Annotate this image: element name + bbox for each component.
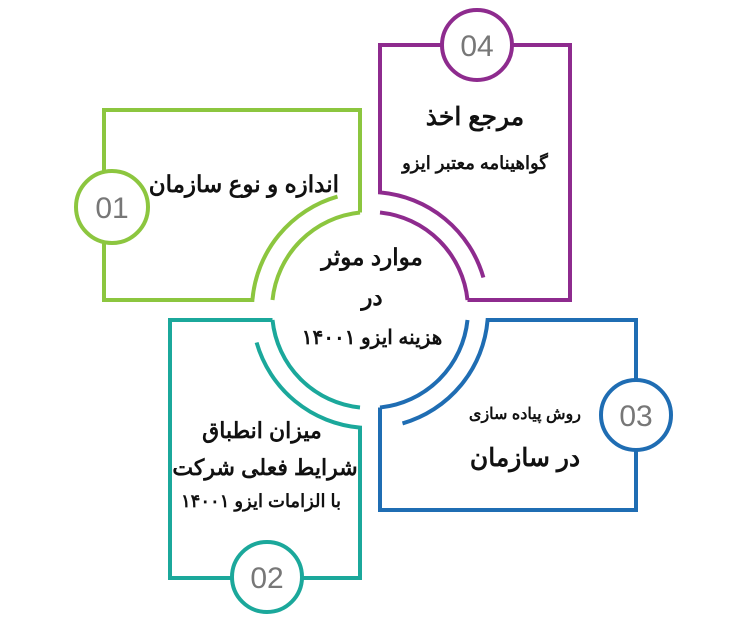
badge 04: 04 <box>460 30 494 63</box>
panel: teal box 02 <box>170 320 360 578</box>
panel: blue box 03 <box>380 320 636 510</box>
text: purple panel: گواهینامه معتبر ایزو <box>400 152 548 174</box>
badge 02: 02 <box>250 562 284 595</box>
text: purple panel <box>400 103 548 174</box>
badge 03: 03 <box>619 400 653 433</box>
panel: green box 01 <box>104 110 360 300</box>
text: center title <box>302 244 442 350</box>
badge 01: 01 <box>95 192 129 225</box>
badge 03 <box>601 380 671 450</box>
text: blue panel: در سازمان <box>470 444 580 473</box>
text: teal panel: شرایط فعلی شرکت <box>172 455 358 481</box>
text: center title: در <box>359 284 383 312</box>
text: teal panel: با الزامات ایزو ۱۴۰۰۱ <box>181 491 341 512</box>
text: center title: هزینه ایزو ۱۴۰۰۱ <box>302 327 442 350</box>
text: teal panel <box>172 418 358 512</box>
panel: purple box 04 <box>380 45 570 300</box>
badge 02 <box>232 542 302 612</box>
text: blue panel: روش پیاده سازی <box>469 406 581 424</box>
text: teal panel: میزان انطباق <box>202 418 322 444</box>
text: green panel: اندازه و نوع سازمان <box>149 171 339 199</box>
text: blue panel <box>469 406 581 473</box>
badge 04 <box>442 10 512 80</box>
text: purple panel: مرجع اخذ <box>426 103 524 132</box>
text: center title: موارد موثر <box>319 244 423 272</box>
badge 01 <box>76 171 148 243</box>
